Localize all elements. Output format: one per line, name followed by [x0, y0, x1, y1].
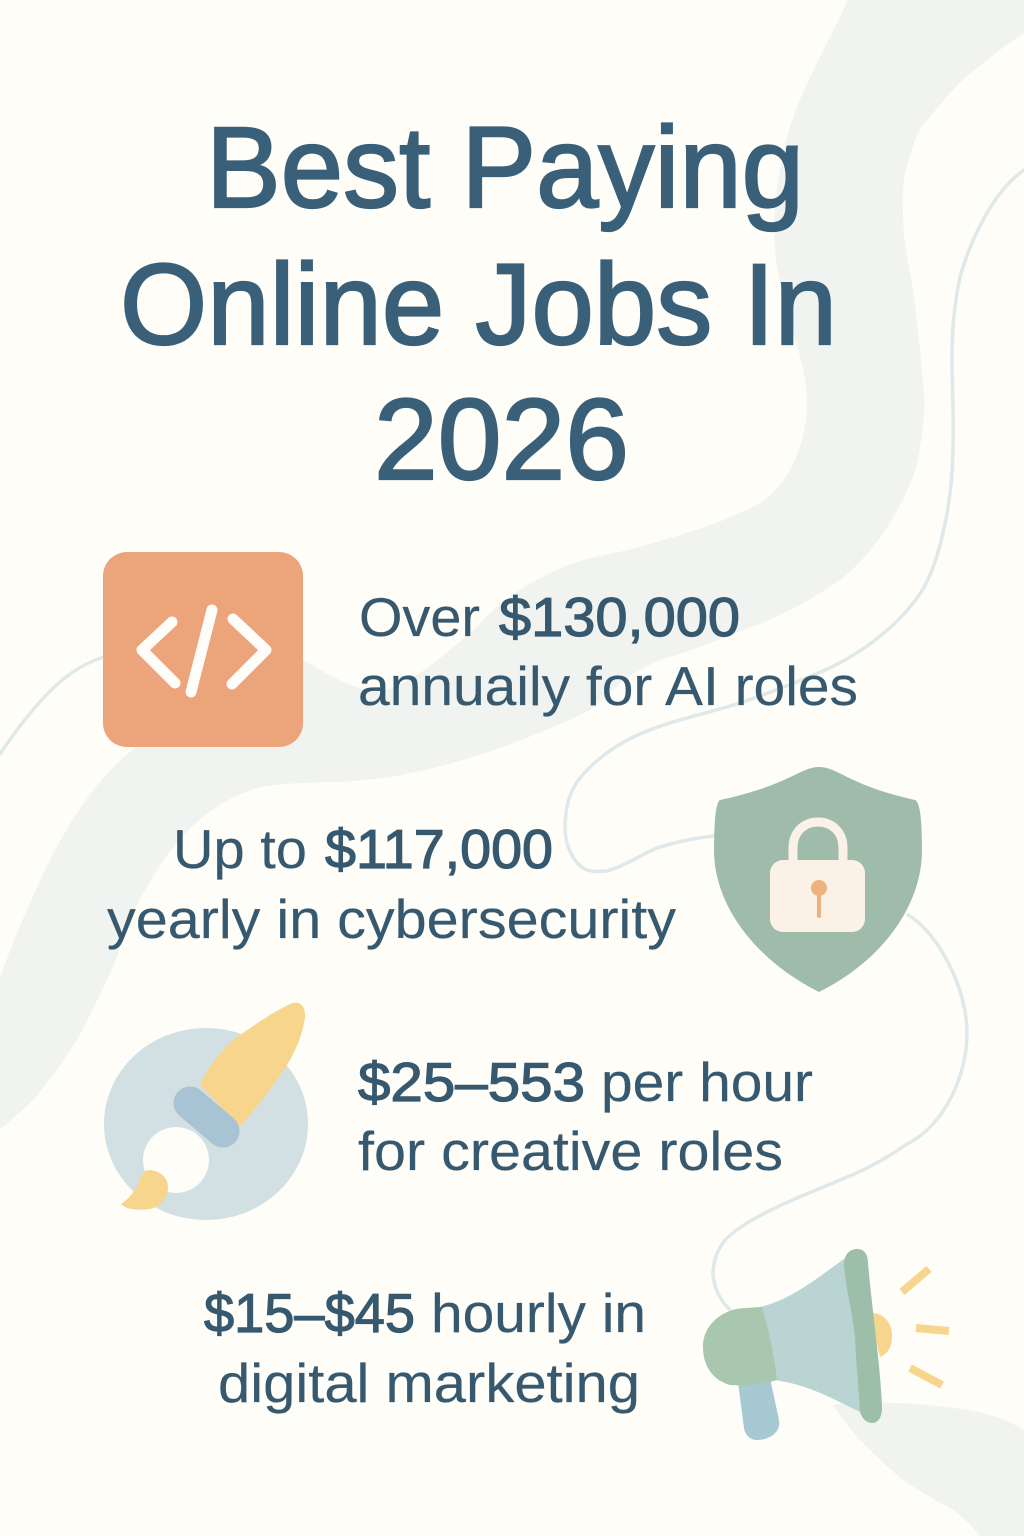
title	[120, 104, 837, 504]
text: cybersecurity salary: $117,000	[325, 818, 553, 880]
text: digital marketing pay	[204, 1282, 646, 1414]
icon: megaphone	[703, 1249, 949, 1440]
icon: paintbrush	[104, 1003, 308, 1220]
icon: code brackets	[103, 552, 303, 747]
text: AI roles salary: annuaily for AI roles	[358, 655, 858, 717]
title: 2026	[374, 376, 629, 504]
text: creative roles pay	[358, 1051, 813, 1182]
text: AI roles salary: Over	[359, 586, 480, 648]
panel: creative roles	[104, 1003, 813, 1220]
text: creative roles pay: $25–553	[358, 1051, 585, 1113]
panel: cybersecurity	[107, 767, 922, 992]
text: digital marketing pay: $15–$45	[204, 1282, 415, 1344]
text: creative roles pay: per hour	[601, 1051, 813, 1113]
panel: AI roles	[103, 552, 858, 747]
text: digital marketing pay: digital marketing	[218, 1352, 640, 1414]
text: cybersecurity salary: yearly in cybersecurity	[107, 888, 677, 950]
panel: digital marketing	[204, 1249, 949, 1440]
text: digital marketing pay: hourly in	[431, 1282, 646, 1344]
text: cybersecurity salary: Up to	[173, 818, 307, 880]
icon: shield with padlock	[714, 767, 922, 992]
text: AI roles salary	[358, 586, 858, 717]
text: AI roles salary: $130,000	[499, 586, 740, 648]
text: creative roles pay: for creative roles	[358, 1120, 783, 1182]
title: Best Paying	[206, 104, 804, 232]
text: cybersecurity salary	[107, 818, 677, 950]
title: Online Jobs In	[120, 241, 837, 369]
